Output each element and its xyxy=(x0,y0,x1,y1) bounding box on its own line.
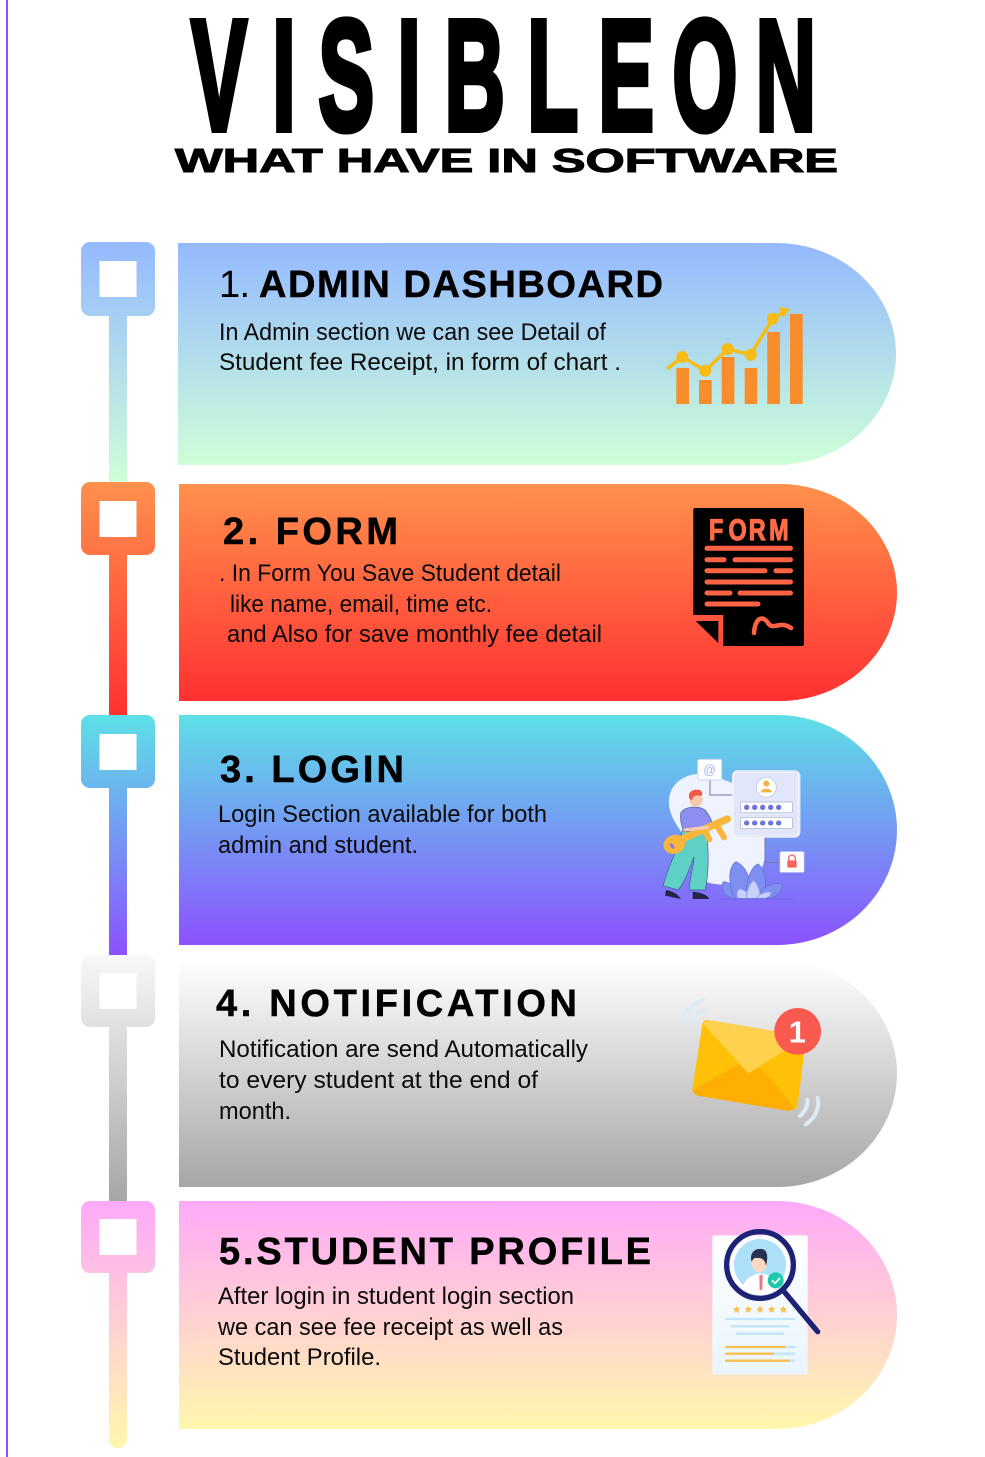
body text: notification: month. xyxy=(219,1098,291,1125)
body text: student profile: we can see fee receipt as well as xyxy=(217,1314,563,1341)
panel 1 background xyxy=(178,243,896,465)
panel: form xyxy=(179,484,897,701)
icon: envelope with notification badge xyxy=(682,1000,821,1124)
timeline marker 3 xyxy=(81,715,155,955)
body text: admin xyxy=(219,319,621,376)
heading: notification: 4. NOTIFICATION xyxy=(216,983,577,1025)
body text: notification: Notification are send Automatically xyxy=(219,1036,588,1063)
body text: notification: to every student at the end of xyxy=(219,1067,538,1094)
heading: student profile: 5.STUDENT PROFILE xyxy=(219,1231,651,1273)
timeline marker 5 xyxy=(81,1201,155,1448)
panel: notification xyxy=(179,960,897,1187)
timeline marker 1 xyxy=(81,242,155,483)
panel 4 background xyxy=(179,960,897,1187)
icon: bar chart with trend line xyxy=(667,307,803,404)
body text: notification xyxy=(219,1036,588,1125)
icon: envelope with notification badge: 1 xyxy=(789,1015,806,1049)
body text: student profile: After login in student login section xyxy=(218,1283,574,1310)
panel 3 background xyxy=(179,715,897,945)
panel 2 background xyxy=(179,484,897,701)
icon: form document: FORM xyxy=(709,513,789,547)
timeline marker 4 xyxy=(81,955,155,1201)
body text: form: like name, email, time etc. xyxy=(230,591,492,618)
heading: login: 3. LOGIN xyxy=(220,749,404,791)
body text: form: . In Form You Save Student detail xyxy=(219,560,561,587)
icon: form document xyxy=(693,508,804,646)
icon: login illustration xyxy=(661,759,804,899)
panel: student profile xyxy=(179,1201,897,1429)
timeline marker 2 xyxy=(81,482,155,716)
icon: profile document under magnifier xyxy=(712,1232,818,1375)
subtitle: WHAT HAVE IN SOFTWARE xyxy=(175,142,838,179)
body text: admin: Student fee Receipt, in form of chart . xyxy=(219,349,621,376)
body text: student profile xyxy=(217,1283,574,1371)
body text: admin: In Admin section we can see Detail of xyxy=(219,319,606,346)
body text: form: and Also for save monthly fee detail xyxy=(227,621,602,648)
body text: form xyxy=(219,560,602,648)
heading: admin dashboard: 1. xyxy=(219,264,250,306)
body text: login: Login Section available for both xyxy=(218,801,547,828)
body text: login: admin and student. xyxy=(218,832,418,859)
icon: login illustration: @ xyxy=(703,763,716,777)
panel 5 background xyxy=(179,1201,897,1429)
body text: login xyxy=(218,801,547,859)
heading: admin dashboard: ADMIN DASHBOARD xyxy=(259,264,663,306)
left border line xyxy=(6,0,8,1457)
body text: student profile: Student Profile. xyxy=(218,1344,381,1371)
panel: admin dashboard xyxy=(178,243,896,465)
panel: login xyxy=(179,715,897,945)
heading: form: 2. FORM xyxy=(223,511,398,553)
